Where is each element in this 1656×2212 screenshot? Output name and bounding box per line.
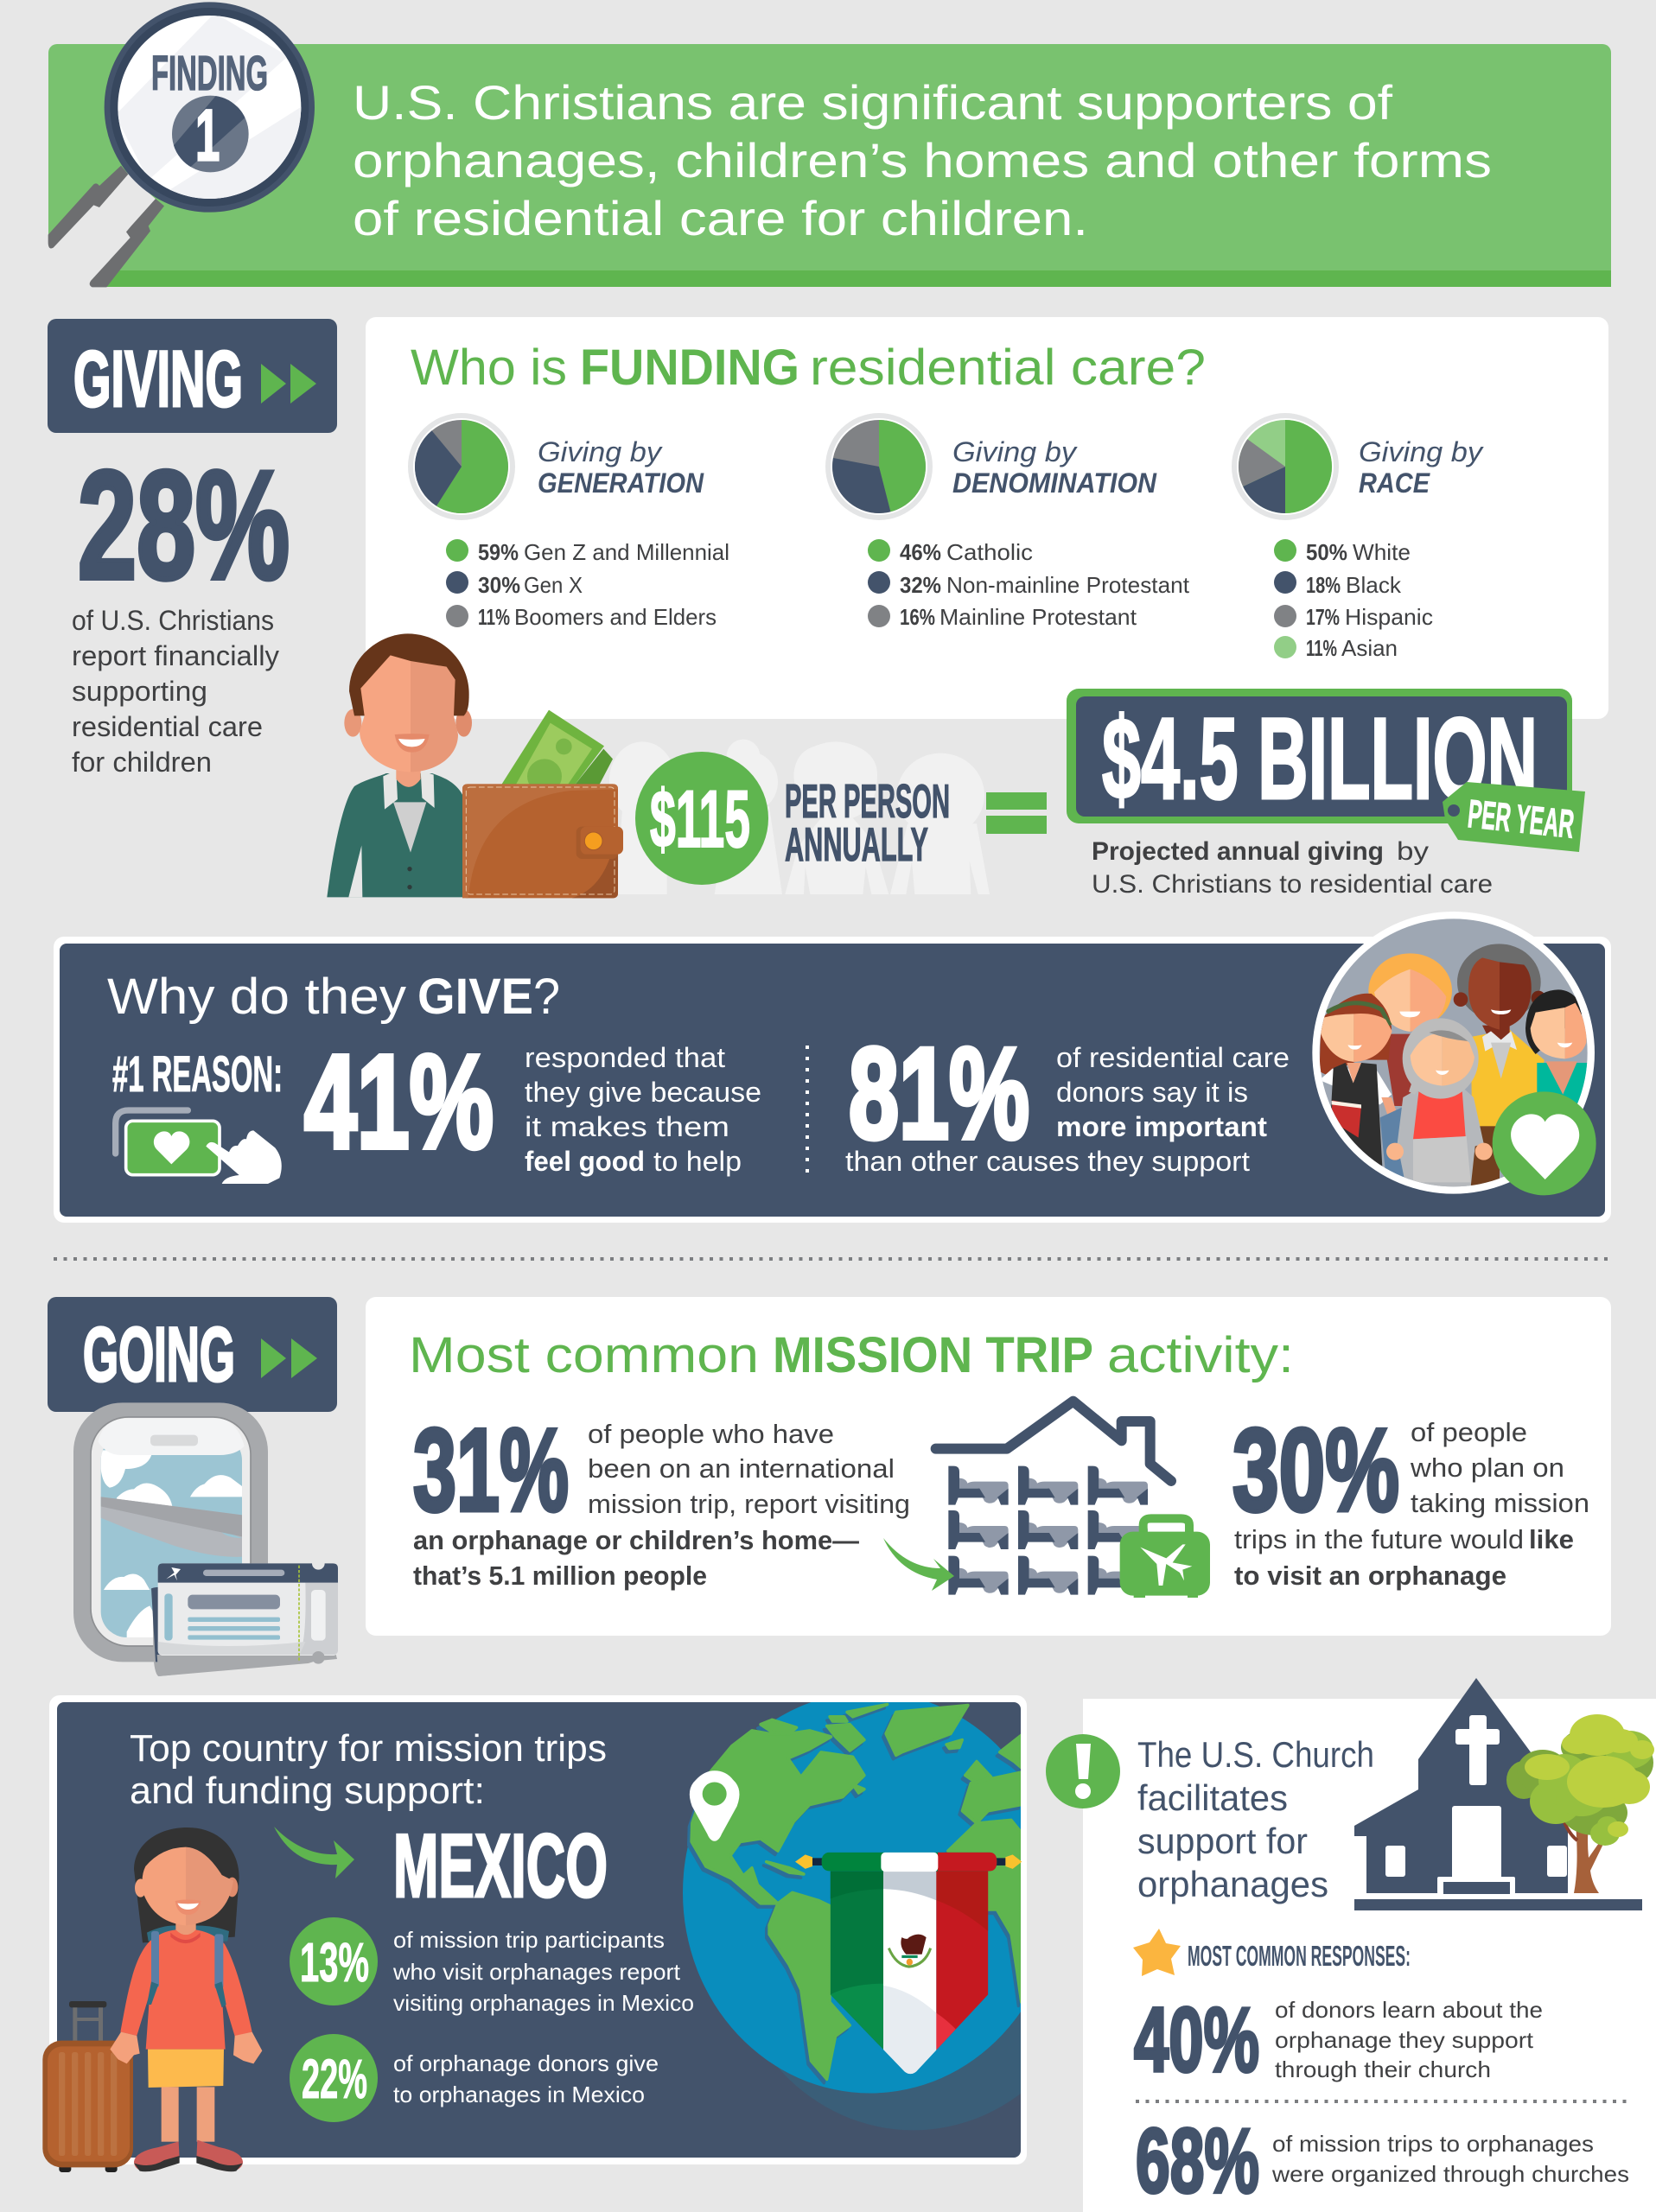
text: per person annually bbox=[785, 774, 950, 871]
text: plan to visit orphanage: who plan on bbox=[1410, 1452, 1564, 1483]
text: projected annual giving: by bbox=[1397, 837, 1429, 866]
heading: Top country for mission trips bbox=[130, 1727, 607, 1770]
icon: exclamation bbox=[1046, 1734, 1120, 1808]
text: per person annually: PER PERSON bbox=[785, 774, 950, 828]
heading: GIVE bbox=[417, 969, 533, 1025]
stat: 40 percent: 40% bbox=[1134, 1989, 1259, 2091]
label: most common responses: MOST COMMON RESPONSES: bbox=[1188, 1940, 1411, 1972]
panel: church facilitates support bbox=[1046, 1678, 1656, 2212]
illustration: globe with pin and flag bbox=[683, 1702, 1022, 2131]
badge: 13 percent bbox=[290, 1917, 378, 2005]
legend: denomination: Non-mainline Protestant bbox=[946, 572, 1190, 598]
panel: top country mexico bbox=[42, 1692, 1099, 2172]
heading: FUNDING bbox=[580, 340, 799, 396]
text: 68 percent description: of mission trips to orphanages bbox=[1272, 2131, 1594, 2157]
heading: facilitates bbox=[1137, 1777, 1288, 1818]
legend: generation bbox=[446, 539, 729, 630]
icon: magnifying glass bbox=[48, 2, 315, 288]
label: denomination: Giving by bbox=[952, 436, 1078, 467]
tag: per year bbox=[1443, 782, 1585, 852]
text: projected annual giving: Projected annual giving bbox=[1092, 837, 1384, 866]
heading: MISSION TRIP bbox=[773, 1327, 1093, 1383]
legend: race: 50% bbox=[1306, 539, 1347, 565]
legend: generation: Gen X bbox=[524, 572, 583, 598]
legend: generation: 59% bbox=[478, 539, 519, 565]
text: more important bbox=[845, 1042, 1290, 1177]
text: 13 percent description: visiting orphanages in Mexico bbox=[393, 1990, 694, 2016]
badge: 13 percent: 13% bbox=[300, 1931, 369, 1993]
legend: denomination: Catholic bbox=[946, 539, 1033, 565]
text: 28 percent description: of U.S. Christians bbox=[72, 605, 274, 636]
heading: support for bbox=[1137, 1821, 1308, 1861]
heading bbox=[107, 969, 560, 1025]
text: feel good reason: they give because bbox=[525, 1077, 761, 1108]
arrow: to beds bbox=[883, 1538, 954, 1591]
arrow: to mexico bbox=[274, 1827, 354, 1878]
text: more important: than other causes they support bbox=[845, 1146, 1250, 1177]
illustration: circle of donors bbox=[1312, 912, 1596, 1195]
legend: race: 11% bbox=[1306, 635, 1337, 661]
heading: U.S. Christians are significant supporters of bbox=[353, 75, 1392, 130]
icon: house of beds bbox=[936, 1402, 1210, 1598]
heading: ? bbox=[533, 969, 560, 1025]
heading bbox=[1137, 1734, 1374, 1904]
heading: of residential care for children. bbox=[353, 191, 1088, 245]
text: 13 percent description: of mission trip participants bbox=[393, 1927, 665, 1953]
heading: Who is bbox=[411, 340, 567, 396]
text: orphanage visit bbox=[413, 1419, 910, 1591]
legend: denomination: 16% bbox=[900, 604, 935, 630]
legend: race bbox=[1274, 539, 1433, 661]
title: mexico: MEXICO bbox=[393, 1816, 608, 1916]
illustration: girl with suitcase bbox=[42, 1827, 262, 2172]
flag of mexico bbox=[795, 1853, 1022, 2075]
icon: location pin bbox=[690, 1770, 739, 1841]
legend: race: 17% bbox=[1306, 604, 1340, 630]
panel: who is funding bbox=[366, 317, 1608, 719]
text: feel good reason bbox=[525, 1042, 761, 1177]
text: more important: donors say it is bbox=[1056, 1077, 1248, 1108]
heading: Most common bbox=[409, 1327, 759, 1383]
panel: mission trip activity bbox=[366, 1297, 1611, 1636]
text: plan to visit orphanage bbox=[1234, 1417, 1589, 1591]
text: plan to visit orphanage: to visit an orphanage bbox=[1234, 1560, 1506, 1591]
panel: why do they give bbox=[54, 912, 1611, 1223]
icon: tree bbox=[1506, 1714, 1654, 1893]
text: 22 percent description bbox=[393, 2050, 659, 2107]
text: orphanage visit: that’s 5.1 million people bbox=[413, 1560, 707, 1591]
heading bbox=[409, 1327, 1294, 1383]
label: denomination: DENOMINATION bbox=[952, 467, 1157, 499]
text: projected annual giving bbox=[1092, 837, 1493, 899]
legend: denomination bbox=[868, 539, 1190, 630]
header banner: finding 1 bbox=[48, 2, 1611, 288]
text: feel good reason: responded that bbox=[525, 1042, 725, 1073]
legend: denomination: 46% bbox=[900, 539, 941, 565]
label: number 1 reason: #1 REASON: bbox=[112, 1046, 283, 1103]
text: feel good reason: it makes them bbox=[525, 1111, 729, 1142]
heading: orphanages, children’s homes and other forms bbox=[353, 133, 1492, 188]
badge: 115 dollars bbox=[635, 752, 768, 885]
label: race bbox=[1359, 436, 1484, 499]
equals sign bbox=[986, 792, 1047, 834]
legend: generation: 11% bbox=[478, 604, 510, 630]
label: race: Giving by bbox=[1359, 436, 1484, 467]
label: race: RACE bbox=[1359, 467, 1430, 499]
icon: magnifying glass: FINDING bbox=[151, 47, 268, 101]
icon: church bbox=[1354, 1678, 1642, 1910]
illustration: plane window and tickets bbox=[73, 1402, 338, 1676]
heading: residential care? bbox=[810, 340, 1206, 396]
label: generation: Giving by bbox=[538, 436, 663, 467]
text: 28 percent description: supporting bbox=[72, 676, 207, 707]
stat: 41 percent: 41% bbox=[304, 1027, 494, 1176]
icon: tap heart button bbox=[116, 1110, 282, 1184]
text: 22 percent description: to orphanages in Mexico bbox=[393, 2082, 645, 2107]
label box: giving: GIVING bbox=[73, 335, 243, 423]
text: projected annual giving: U.S. Christians to residential care bbox=[1092, 870, 1493, 899]
pie: race bbox=[1232, 413, 1339, 520]
text: 28 percent description: residential care bbox=[72, 711, 263, 742]
heading: Why do they bbox=[107, 969, 406, 1025]
icon: star bbox=[1133, 1929, 1181, 1976]
text: plan to visit orphanage: trips in the future would bbox=[1234, 1524, 1524, 1554]
icon: crowd silhouettes bbox=[609, 740, 990, 894]
label box: going bbox=[48, 1297, 337, 1412]
text: feel good reason: feel good bbox=[525, 1146, 645, 1177]
text: 68 percent description: were organized through churches bbox=[1271, 2161, 1629, 2187]
text: plan to visit orphanage: like bbox=[1529, 1524, 1574, 1554]
legend: race: Hispanic bbox=[1345, 604, 1433, 630]
heading bbox=[411, 340, 1206, 396]
text: more important: of residential care bbox=[1056, 1042, 1290, 1073]
text: 40 percent description: of donors learn about the bbox=[1275, 1997, 1543, 2023]
text: orphanage visit: an orphanage or children’s home— bbox=[413, 1525, 859, 1555]
text: 28 percent description: report financially bbox=[72, 640, 279, 671]
text: 40 percent description: orphanage they support bbox=[1275, 2027, 1534, 2053]
legend: race: White bbox=[1353, 539, 1411, 565]
text: 28 percent description: for children bbox=[72, 747, 212, 778]
stat: 81 percent: 81% bbox=[849, 1020, 1029, 1166]
heading bbox=[130, 1727, 607, 1812]
label: generation: GENERATION bbox=[538, 467, 704, 499]
text: 68 percent description bbox=[1271, 2131, 1629, 2187]
callout: 4.5 billion bbox=[1067, 689, 1585, 852]
label box: going: GOING bbox=[83, 1311, 235, 1397]
legend: generation: Gen Z and Millennial bbox=[524, 539, 729, 565]
heading: and funding support: bbox=[130, 1770, 485, 1812]
label box: giving bbox=[48, 319, 337, 433]
text: 22 percent description: of orphanage donors give bbox=[393, 2050, 659, 2076]
illustration: wallet with cash bbox=[462, 710, 623, 898]
stat: 68 percent: 68% bbox=[1136, 2110, 1259, 2212]
text: 28 percent description bbox=[72, 605, 279, 778]
text: more important: more important bbox=[1056, 1111, 1267, 1142]
legend: race: 18% bbox=[1306, 572, 1341, 598]
badge: 22 percent: 22% bbox=[302, 2048, 367, 2110]
stat: 31 percent: 31% bbox=[413, 1404, 569, 1535]
text: feel good reason: to help bbox=[653, 1146, 742, 1177]
legend: generation: 30% bbox=[478, 572, 520, 598]
badge: 115 dollars: $115 bbox=[650, 773, 750, 864]
illustration: man bbox=[327, 633, 472, 897]
heading: The U.S. Church bbox=[1137, 1734, 1374, 1775]
text: plan to visit orphanage: of people bbox=[1411, 1417, 1527, 1447]
legend: denomination: Mainline Protestant bbox=[939, 604, 1137, 630]
stat: 30 percent: 30% bbox=[1232, 1404, 1399, 1535]
text: orphanage visit: of people who have bbox=[588, 1419, 834, 1449]
text: 40 percent description: through their church bbox=[1275, 2056, 1491, 2082]
label: denomination bbox=[952, 436, 1157, 499]
legend: race: Black bbox=[1346, 572, 1402, 598]
badge: 22 percent bbox=[290, 2034, 378, 2122]
text: plan to visit orphanage: taking mission bbox=[1411, 1488, 1589, 1518]
text: orphanage visit: been on an international bbox=[588, 1453, 895, 1484]
heading bbox=[353, 75, 1492, 245]
icon: green suitcase with plane bbox=[1120, 1518, 1210, 1598]
label: generation bbox=[538, 436, 704, 499]
legend: generation: Boomers and Elders bbox=[514, 604, 717, 630]
stat: 28 percent: 28% bbox=[78, 439, 290, 611]
pie: generation bbox=[408, 413, 515, 520]
stat: 28 percent bbox=[72, 439, 290, 778]
text: 40 percent description bbox=[1275, 1997, 1543, 2082]
icon: magnifying glass: 1 bbox=[195, 95, 220, 176]
heading: activity: bbox=[1107, 1327, 1294, 1383]
pie: denomination bbox=[825, 413, 933, 520]
text: per person annually: ANNUALLY bbox=[785, 817, 928, 871]
text: orphanage visit: mission trip, report visiting bbox=[588, 1489, 910, 1519]
text: 13 percent description bbox=[392, 1927, 694, 2016]
legend: denomination: 32% bbox=[900, 572, 941, 598]
text: 13 percent description: who visit orphanages report bbox=[392, 1959, 681, 1985]
heading: orphanages bbox=[1137, 1864, 1328, 1904]
legend: race: Asian bbox=[1341, 635, 1398, 661]
